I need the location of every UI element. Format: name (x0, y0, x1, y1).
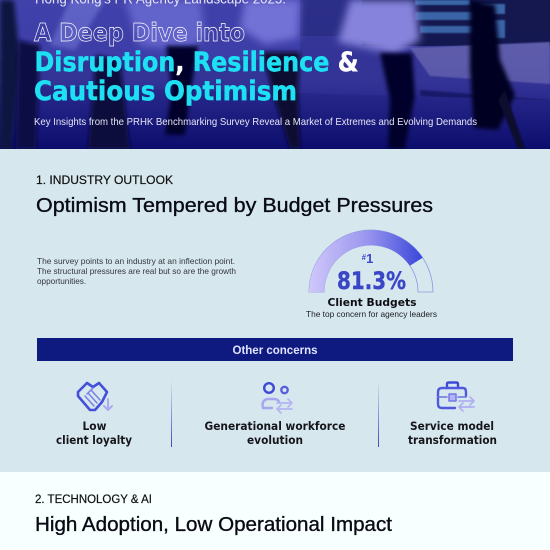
text: subtitle: Key Insights from the PRHK Benchmarking Survey Reveal a Market of Extremes and Evolving Demands (34, 117, 477, 128)
heading: section one: Optimism Tempered by Budget Pressures (36, 194, 433, 217)
text: service model transformation (408, 419, 497, 447)
heading: title line three: Cautious Optimism (34, 76, 297, 107)
figures (125, 0, 205, 50)
chart: gauge: # (362, 253, 367, 262)
text: section one body: opportunities. (37, 277, 86, 286)
text: section one label: 1. INDUSTRY OUTLOOK (36, 175, 173, 187)
icon: generational workforce (263, 383, 292, 413)
text: section one body: The survey points to an industry at an inflection point. (37, 257, 235, 266)
panel: technology section (0, 472, 550, 550)
icon: handshake with down arrow (78, 383, 112, 410)
heading: section two: High Adoption, Low Operational Impact (35, 513, 392, 536)
text: generational workforce evolution (204, 419, 346, 447)
text: low client loyalty (56, 419, 132, 447)
icon: briefcase with arrows (438, 382, 474, 411)
text: client budgets: Client Budgets (328, 296, 417, 309)
text: section one body (37, 257, 236, 286)
text: generational workforce evolution: Generational workforce (204, 419, 346, 433)
text: gauge caption: The top concern for agency leaders (306, 309, 437, 319)
heading: outlined line: A Deep Dive into (34, 18, 245, 47)
text: low client loyalty: Low (82, 419, 107, 433)
text: section one body: The structural pressures are real but so are the growth (37, 267, 236, 276)
panel: industry outlook section (0, 149, 550, 472)
panel: header photo background (0, 0, 550, 150)
text: generational workforce evolution: evolution (247, 433, 303, 447)
banner: other concerns: Other concerns (232, 345, 318, 357)
text: low client loyalty: client loyalty (56, 433, 132, 447)
heading: title line two: Disruption, Resilience & (34, 47, 358, 78)
chart: gauge (309, 230, 433, 295)
text: service model transformation: Service model (410, 419, 494, 433)
chart: gauge: 81.3% (337, 267, 406, 295)
text: service model transformation: transformation (408, 433, 497, 447)
banner: other concerns (37, 338, 513, 361)
text: section two label: 2. TECHNOLOGY & AI (35, 494, 152, 506)
chart: gauge: 1 (366, 251, 373, 266)
